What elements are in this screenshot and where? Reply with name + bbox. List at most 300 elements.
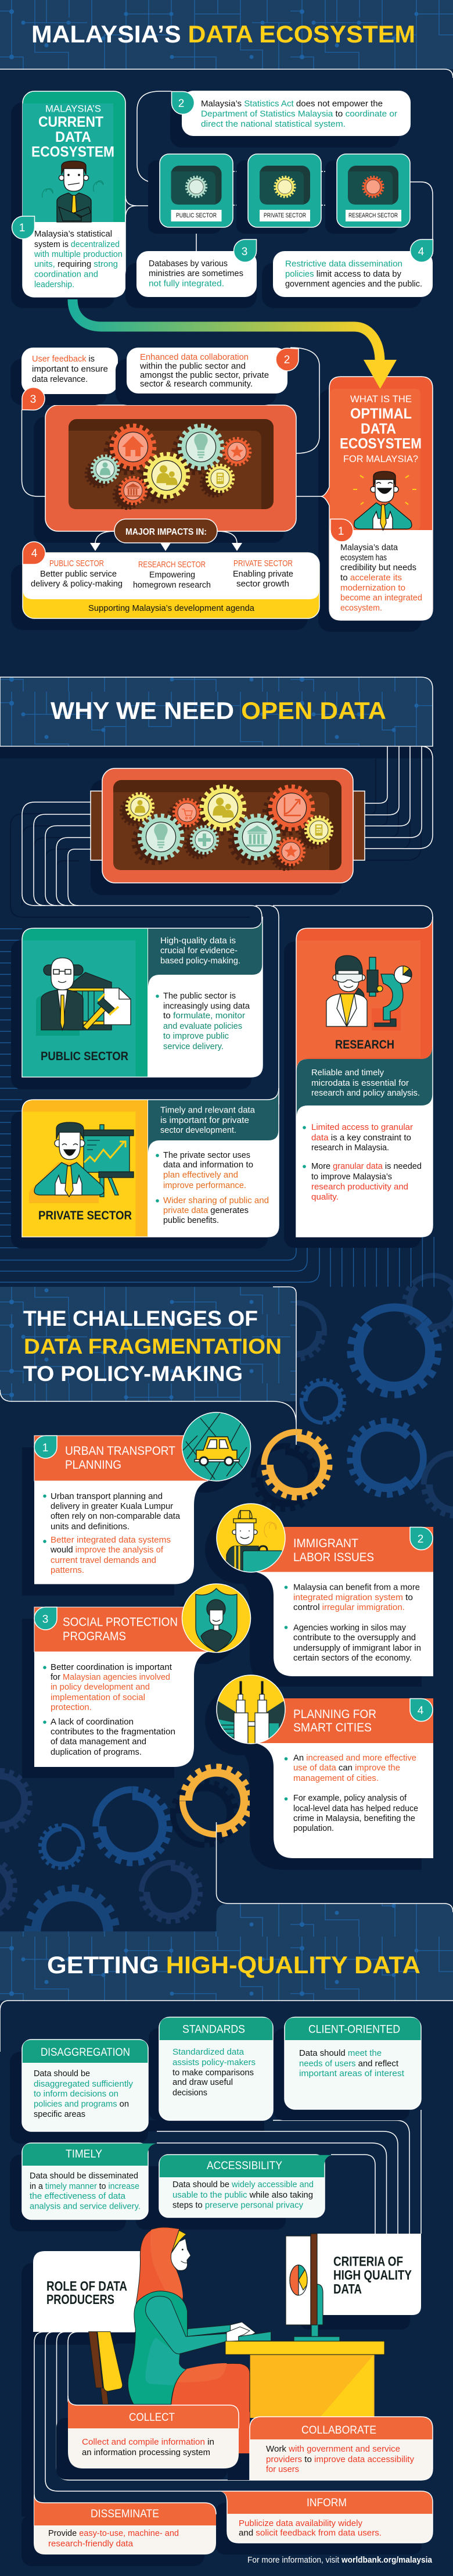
- bullets: control irregular immigration.: [293, 1603, 405, 1612]
- panel: research sector: [325, 154, 410, 234]
- title: WHY WE NEED OPEN DATA: [51, 697, 386, 724]
- tag 2: 2: [178, 98, 184, 110]
- connector lines: [125, 171, 433, 251]
- desk: [225, 2341, 384, 2418]
- bullets: population.: [293, 1824, 334, 1833]
- text block: [340, 543, 422, 613]
- icon rays: [353, 475, 416, 505]
- card: timely: [10, 2143, 157, 2231]
- bullets: current travel demands and: [51, 1556, 156, 1565]
- card: accessibility: steps to preserve personal privacy: [172, 2201, 304, 2210]
- panel: role of data producers: [21, 2251, 142, 2345]
- heading: DATA: [361, 421, 396, 437]
- gear: bulb: [180, 426, 222, 468]
- panel: role of data producers: ROLE OF DATA: [46, 2278, 127, 2294]
- card: timely: in a timely manner to increase: [30, 2182, 139, 2191]
- callout: databases not integrated: ministries are sometimes: [149, 269, 243, 278]
- icon: woman at computer: [89, 2227, 375, 2418]
- bullets: crime in Malaysia, benefiting the: [293, 1814, 415, 1823]
- tag 1: [34, 1436, 57, 1458]
- card: disaggregation: disaggregated sufficiently: [34, 2080, 134, 2089]
- heading: [65, 1444, 175, 1472]
- card: accessibility: [159, 2155, 332, 2217]
- bullets: protection.: [51, 1703, 92, 1712]
- bullets: An increased and more effective: [293, 1754, 416, 1763]
- bullets: [43, 1492, 181, 1575]
- header: challenges of data fragmentation: [0, 1287, 296, 1445]
- icon: gear: [363, 177, 383, 197]
- icon: scientist with microscope: [326, 956, 412, 1031]
- card: timely: TIMELY: [66, 2148, 102, 2160]
- card: inform: INFORM: [307, 2497, 347, 2509]
- callout: user feedback: important to ensure: [32, 365, 108, 374]
- title: MALAYSIA’S DATA ECOSYSTEM: [31, 20, 415, 48]
- heading: ECOSYSTEM: [340, 436, 422, 452]
- shadow: accessibility: [136, 2166, 286, 2230]
- lead text: [160, 1105, 256, 1135]
- panel: public sector: [148, 154, 233, 234]
- background gears: challenges section: [0, 1264, 453, 1977]
- card: disaggregation: to inform decisions on: [34, 2090, 118, 2099]
- lead text: [160, 936, 240, 966]
- panel: criteria of high quality data: HIGH QUALITY: [333, 2267, 412, 2282]
- bullets: Limited access to granular: [311, 1123, 413, 1132]
- tag 4: 4: [418, 246, 425, 258]
- panel: private sector: PRIVATE SECTOR: [264, 212, 306, 219]
- text block: Malaysia’s statistical: [34, 230, 112, 239]
- text block: system is decentralized: [34, 240, 120, 249]
- panel: immigrant labor issues: [205, 1504, 433, 1687]
- heading: PROGRAMS: [63, 1630, 126, 1643]
- lead text: Reliable and timely: [311, 1068, 384, 1078]
- tag 3: 3: [30, 393, 36, 406]
- criteria wiring: [148, 2110, 421, 2234]
- icon: happy man thumbs up: [354, 471, 412, 530]
- lead text: High-quality data is: [160, 936, 236, 946]
- card: disaggregation: Data should be: [34, 2069, 90, 2078]
- lead text: microdata is essential for: [311, 1079, 409, 1088]
- bullets: research in Malaysia.: [311, 1143, 389, 1153]
- text block: modernization to: [340, 584, 405, 593]
- bullets: certain sectors of the economy.: [293, 1654, 412, 1663]
- panel: role of data producers: PRODUCERS: [46, 2292, 114, 2307]
- private sector impact: sector growth: [236, 579, 289, 589]
- gear: home: [112, 426, 154, 468]
- bullets: in policy development and: [51, 1683, 150, 1692]
- card: inform: and solicit feedback from data users.: [239, 2529, 382, 2538]
- panel: private sector: [236, 154, 321, 234]
- gear: calculator: [305, 817, 332, 843]
- bullets: often rely on non-comparable data: [51, 1512, 181, 1521]
- bullets: Agencies working in silos may: [293, 1623, 407, 1633]
- text block: ecosystem.: [340, 604, 382, 613]
- gear: people: [202, 787, 244, 829]
- card: disaggregation: DISAGGREGATION: [41, 2047, 130, 2059]
- card: accessibility: ACCESSIBILITY: [207, 2160, 282, 2172]
- tag 2: [172, 92, 194, 114]
- panel: research card: [284, 917, 433, 1248]
- bullets: data is a key constraint to: [311, 1133, 411, 1143]
- callout: databases not integrated: Databases by various: [149, 259, 228, 269]
- tag 4: [410, 1698, 433, 1722]
- tag 1: 1: [42, 1442, 48, 1454]
- bullets: [43, 1663, 175, 1757]
- panel: research sector: RESEARCH SECTOR: [348, 212, 398, 219]
- card: disseminate: [21, 2495, 216, 2566]
- callout: databases not integrated: not fully integrated.: [149, 279, 224, 288]
- icon: car on map: [180, 1412, 251, 1482]
- card: standards: [149, 2017, 273, 2120]
- bullets: Malaysia can benefit from a more: [293, 1583, 420, 1593]
- lead text: research and policy analysis.: [311, 1089, 420, 1098]
- callout: enhanced collaboration: amongst the public sector, private: [140, 371, 269, 380]
- icon: public official with bank and gavel: [36, 958, 131, 1036]
- bullets: for Malaysian agencies involved: [51, 1673, 170, 1682]
- callout: enhanced collaboration: within the public sector and: [139, 362, 246, 371]
- bullets: undersupply of immigrant labor in: [293, 1644, 421, 1653]
- card: standards: STANDARDS: [182, 2024, 245, 2035]
- card: client-oriented: important areas of interest: [299, 2069, 404, 2078]
- bullets: public benefits.: [163, 1216, 219, 1225]
- lead text: based policy-making.: [160, 957, 240, 966]
- heading: MALAYSIA’S: [45, 103, 101, 114]
- title: DATA FRAGMENTATION: [24, 1334, 282, 1358]
- bullets: research productivity and: [311, 1182, 408, 1192]
- card: disaggregation: [10, 2040, 148, 2144]
- tag 3: [233, 239, 257, 262]
- heading: DATA: [55, 129, 91, 145]
- card: timely: Data should be disseminated: [30, 2171, 138, 2181]
- panel: urban transport planning: [22, 1412, 251, 1595]
- bullets: patterns.: [51, 1566, 84, 1575]
- gear shadows: [121, 792, 326, 870]
- panel: public sector: PUBLIC SECTOR: [176, 212, 217, 219]
- bullets: [156, 992, 250, 1051]
- tag 1: [12, 216, 35, 239]
- callout: restrictive policies: government agencies and the public.: [285, 280, 422, 289]
- bullets: Better coordination is important: [51, 1663, 172, 1672]
- gear: star: [224, 438, 250, 465]
- bullets: and evaluate policies: [163, 1022, 242, 1031]
- text block: become an integrated: [340, 593, 422, 603]
- bullets: service delivery.: [163, 1042, 224, 1051]
- footer: more information: For more information, visit worldbank.org/malaysia: [247, 2556, 433, 2565]
- arrow: current to optimal: [73, 299, 397, 389]
- side wiring: [0, 928, 436, 1287]
- gear: people: [146, 455, 188, 496]
- panel: criteria of high quality data: CRITERIA OF: [333, 2254, 403, 2269]
- bullets: contributes to the fragmentation: [51, 1727, 175, 1737]
- card: collect: COLLECT: [129, 2412, 175, 2424]
- tag 4: 4: [418, 1705, 424, 1717]
- arrows: [90, 543, 242, 551]
- panel: impacts gear box: [22, 348, 319, 543]
- bullets: management of cities.: [293, 1774, 379, 1783]
- panel: statistics act callout: Department of Statistics Malaysia to coordinate or: [201, 109, 397, 119]
- heading: URBAN TRANSPORT: [65, 1444, 175, 1458]
- bullets: units and definitions.: [51, 1522, 130, 1532]
- heading: WHAT IS THE: [350, 393, 412, 405]
- bullets: The private sector uses: [163, 1151, 250, 1160]
- tag 3: 3: [242, 246, 247, 258]
- title: TO POLICY-MAKING: [23, 1362, 243, 1386]
- title: THE CHALLENGES OF: [23, 1307, 258, 1330]
- gear: orange lower: [173, 1767, 250, 1845]
- header: why we need open data: [0, 677, 433, 759]
- text block: with multiple production: [34, 250, 123, 259]
- card: collaborate: for users: [266, 2465, 299, 2474]
- panel: criteria of high quality data: [286, 2234, 421, 2341]
- panel: optimal data ecosystem: [296, 377, 433, 632]
- heading: SOCIAL PROTECTION: [63, 1616, 178, 1629]
- bullets: Better integrated data systems: [51, 1536, 171, 1545]
- header: Malaysia's data ecosystem: [0, 0, 453, 78]
- bullets: [156, 1151, 269, 1225]
- gear: person: [127, 794, 153, 820]
- heading: SMART CITIES: [293, 1721, 372, 1734]
- public sector impact: PUBLIC SECTOR: [49, 559, 104, 568]
- card: client-oriented: Data should meet the: [299, 2049, 382, 2058]
- card: client-oriented: needs of users and reflect: [299, 2059, 398, 2069]
- card: disaggregation: specific areas: [34, 2110, 85, 2119]
- card: timely: the effectiveness of data: [30, 2192, 126, 2201]
- icon: gear: [186, 177, 206, 197]
- heading: OPTIMAL: [350, 406, 412, 422]
- tag 1: 1: [338, 525, 344, 538]
- bullets: A lack of coordination: [51, 1718, 134, 1727]
- gear: orange upper: [254, 1432, 329, 1509]
- card: disaggregation: policies and programs on: [34, 2099, 129, 2109]
- text block: [34, 230, 123, 289]
- tag 4: 4: [31, 548, 38, 560]
- card: collaborate: COLLABORATE: [301, 2424, 376, 2437]
- bullets: quality.: [311, 1193, 339, 1202]
- text block: to accelerate its: [340, 574, 402, 583]
- heading: FOR MALAYSIA?: [343, 453, 418, 464]
- panel: planning for smart cities: [205, 1675, 433, 1870]
- panel: current data ecosystem: [11, 91, 125, 308]
- lap and shadow beside collect: [228, 2412, 250, 2480]
- card: disseminate: Provide easy-to-use, machine- and: [48, 2529, 179, 2538]
- bullets: improve performance.: [163, 1181, 246, 1190]
- bullets: would improve the analysis of: [50, 1545, 164, 1555]
- tag 3: 3: [42, 1613, 48, 1626]
- icon: worker: [217, 1504, 285, 1575]
- gear: bank: [120, 478, 146, 503]
- card: disseminate: DISSEMINATE: [91, 2508, 159, 2520]
- bullets: data and information to: [163, 1161, 253, 1170]
- heading: [293, 1537, 374, 1564]
- gear: calculator: [207, 465, 233, 492]
- bullets: plan effectively and: [163, 1171, 238, 1180]
- card: client-oriented: [274, 2017, 421, 2120]
- bullets: private data generates: [163, 1206, 249, 1215]
- bullets: More granular data is needed: [311, 1162, 422, 1171]
- callout: restrictive policies: policies limit access to data by: [285, 270, 402, 279]
- bullets: increasingly using data: [163, 1002, 250, 1011]
- panel: criteria of high quality data: DATA: [333, 2281, 362, 2296]
- panel: major impacts: Supporting Malaysia’s development agenda: [88, 604, 255, 613]
- callout: databases not integrated: [125, 239, 257, 308]
- gear: bulb: [140, 816, 182, 858]
- private sector impact: PRIVATE SECTOR: [233, 559, 293, 568]
- heading: IMMIGRANT: [293, 1537, 358, 1550]
- bullets: of data management and: [51, 1737, 146, 1747]
- gear: star: [278, 838, 304, 865]
- title: [23, 1307, 282, 1386]
- lead text: sector development.: [160, 1126, 236, 1135]
- wiring to gear box: [22, 746, 433, 1104]
- research sector impact: homegrown research: [133, 581, 211, 590]
- card: accessibility: usable to the public while also taking: [172, 2191, 313, 2200]
- text block: Malaysia’s data: [340, 543, 398, 552]
- private sector impact: [233, 559, 293, 589]
- bullets: to improve public: [163, 1032, 229, 1041]
- panel: research card: RESEARCH: [335, 1038, 394, 1051]
- icon: shield with woman: [182, 1584, 251, 1652]
- callout: user feedback: [10, 348, 118, 410]
- heading: [340, 393, 422, 464]
- text block: units, requiring strong: [34, 260, 118, 269]
- gear: bank: [236, 816, 278, 858]
- bullets: [285, 1583, 421, 1663]
- panel: major impacts: [11, 519, 319, 630]
- card: collect: an information processing system: [82, 2448, 210, 2457]
- panel: private sector card: [11, 1088, 279, 1248]
- public sector impact: delivery & policy-making: [31, 579, 123, 589]
- bullets: local-level data has helped reduce: [293, 1804, 418, 1813]
- pill: major impacts in: MAJOR IMPACTS IN:: [125, 527, 207, 537]
- lead text: Timely and relevant data: [160, 1105, 256, 1115]
- card: timely: analysis and service delivery.: [30, 2202, 141, 2212]
- bullets: duplication of programs.: [51, 1748, 142, 1757]
- gear: cart: [174, 800, 200, 825]
- icon: gear: [275, 177, 295, 197]
- callout: enhanced collaboration: Enhanced data collaboration: [140, 353, 249, 362]
- icon: monitor: [286, 2234, 340, 2341]
- text block: credibility but needs: [340, 563, 416, 573]
- tag 4: [410, 239, 433, 262]
- bullets: integrated migration system to: [293, 1593, 413, 1602]
- panel: public sector card: [11, 917, 263, 1089]
- bullets: Wider sharing of public and: [163, 1196, 269, 1205]
- research sector impact: Empowering: [149, 571, 195, 580]
- private sector impact: Enabling private: [233, 570, 293, 579]
- callout: user feedback: data relevance.: [32, 375, 88, 384]
- panel: public sector card: PUBLIC SECTOR: [41, 1050, 128, 1063]
- gear: plus: [192, 827, 217, 853]
- panel: private sector card: PRIVATE SECTOR: [38, 1209, 132, 1222]
- research sector impact: RESEARCH SECTOR: [138, 560, 206, 570]
- card: collect: Collect and compile information in: [82, 2438, 214, 2447]
- lead text: [311, 1068, 420, 1098]
- card: collect: [56, 2396, 239, 2480]
- gear: chart: [271, 787, 312, 829]
- tag 3: [34, 1607, 57, 1630]
- heading: CURRENT: [38, 114, 103, 130]
- bullets: [303, 1123, 422, 1202]
- heading: [293, 1708, 376, 1734]
- callout: restrictive policies: Restrictive data dissemination: [285, 259, 402, 269]
- tag 4: [23, 542, 45, 564]
- card: collaborate: [250, 2417, 433, 2480]
- card: client-oriented: CLIENT-ORIENTED: [308, 2024, 400, 2035]
- text block: leadership.: [34, 280, 74, 289]
- title: GETTING HIGH-QUALITY DATA: [47, 1951, 420, 1978]
- panel: statistics act callout: Malaysia’s Statistics Act does not empower the: [201, 99, 383, 109]
- callout: restrictive policies: [262, 239, 433, 308]
- gear shadows: [86, 431, 228, 508]
- bullets: to formulate, monitor: [163, 1011, 245, 1021]
- card: standards: Standardized data: [172, 2048, 245, 2057]
- bullets: The public sector is: [163, 992, 236, 1001]
- panel: statistics act callout: [137, 91, 411, 183]
- text block: ecosystem has: [340, 553, 387, 563]
- bullets: to improve Malaysia’s: [311, 1172, 392, 1182]
- heading: [63, 1616, 178, 1643]
- gear: person: [92, 456, 118, 482]
- bullets: Urban transport planning and: [51, 1492, 163, 1501]
- card: disseminate: research-friendly data: [48, 2539, 134, 2549]
- tag 2: 2: [418, 1533, 423, 1545]
- card: collaborate: Work with government and service: [266, 2445, 400, 2454]
- tag 2: [410, 1527, 433, 1550]
- tag 2: 2: [284, 354, 290, 366]
- header: getting high-quality data: [0, 1822, 453, 2052]
- callout: user feedback: User feedback is: [32, 355, 95, 364]
- card: accessibility: Data should be widely accessible and: [172, 2180, 314, 2189]
- card: standards: and draw useful: [172, 2078, 233, 2087]
- heading: PLANNING FOR: [293, 1708, 376, 1721]
- producer wiring: [21, 2332, 250, 2517]
- card: inform: Publicize data availability widely: [239, 2519, 363, 2528]
- icon: twin towers: [217, 1675, 285, 1748]
- research sector impact: [133, 560, 211, 590]
- heading: [31, 103, 114, 160]
- tag 3: [22, 388, 45, 410]
- bullets: use of data can improve the: [293, 1763, 400, 1773]
- callout: enhanced collaboration: sector & research community.: [140, 380, 253, 389]
- card: standards: decisions: [172, 2088, 207, 2098]
- tag 1: 1: [19, 222, 25, 234]
- panel: statistics act callout: direct the national statistical system.: [201, 120, 346, 129]
- lead text: is important for private: [160, 1116, 249, 1125]
- bullets: [285, 1754, 418, 1833]
- panel: social protection programs: [22, 1584, 251, 1778]
- tag 1: [330, 519, 353, 542]
- bullets: contribute to the oversupply and: [293, 1633, 416, 1643]
- bullets: implementation of social: [51, 1693, 145, 1702]
- panel: open data gear box: [91, 768, 365, 895]
- wire shadows: [10, 759, 421, 917]
- bullets: For example, policy analysis of: [293, 1794, 407, 1803]
- heading: ECOSYSTEM: [31, 144, 114, 160]
- card: collaborate: providers to improve data accessibility: [266, 2455, 415, 2464]
- icon: puzzled man: [42, 161, 103, 222]
- card: inform: [215, 2491, 433, 2554]
- pill: major impacts in: [114, 519, 217, 543]
- public sector impact: Better public service: [40, 570, 117, 579]
- heading: LABOR ISSUES: [293, 1551, 374, 1564]
- text block: coordination and: [34, 270, 98, 279]
- public sector impact: [31, 559, 123, 589]
- lead text: crucial for evidence-: [160, 946, 238, 956]
- card: standards: assists policy-makers: [172, 2058, 256, 2067]
- heading: PLANNING: [65, 1458, 121, 1472]
- icon: businessman with chart: [29, 1122, 134, 1203]
- card: standards: to make comparisons: [172, 2068, 254, 2077]
- tag 2: [276, 348, 299, 371]
